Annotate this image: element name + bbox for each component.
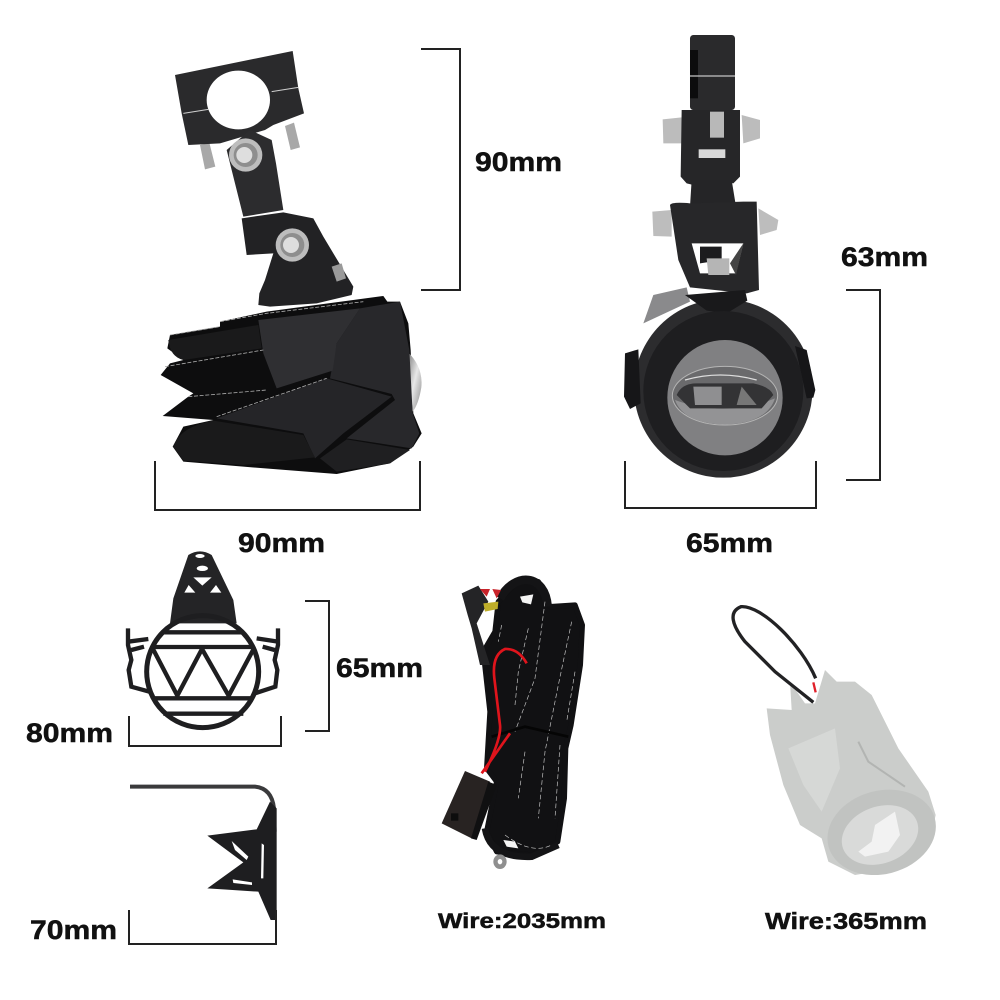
outer housing	[634, 299, 813, 478]
lens reflector	[677, 375, 773, 408]
mount foot	[685, 290, 747, 313]
zip tie	[492, 727, 568, 737]
red wires	[482, 649, 527, 773]
upper bolts	[663, 115, 760, 143]
dimension bracket: guard width	[129, 716, 281, 746]
right wing	[255, 628, 278, 693]
short wire loop	[733, 607, 816, 702]
lens window	[672, 366, 778, 425]
fork inner nut	[700, 243, 743, 275]
middle shiny panel	[258, 308, 360, 388]
upper bolt	[229, 138, 262, 172]
label: wire length 365mm: Wire:365mm	[765, 908, 927, 934]
handlebar clamp	[175, 51, 304, 145]
label: wire length 2035mm: Wire:2035mm	[438, 910, 606, 933]
top connector	[462, 586, 501, 665]
small thread	[332, 263, 346, 282]
label: side width 90mm: 90mm	[238, 528, 325, 558]
relay box	[442, 771, 497, 840]
label: guard height 65mm: 65mm	[336, 653, 423, 683]
lens lower glass	[675, 398, 775, 425]
rear fin surfaces	[168, 325, 315, 465]
grey shoulder	[643, 287, 690, 323]
side view light with bracket	[161, 51, 422, 474]
inner ring	[643, 311, 803, 471]
guard body	[207, 802, 277, 920]
panel crease	[858, 742, 905, 787]
upper arm	[227, 130, 283, 217]
dimension bracket: side guard width	[129, 910, 276, 944]
lens	[407, 352, 422, 412]
front bezel	[818, 778, 946, 887]
mounting tab	[170, 551, 237, 623]
lower body panel	[217, 378, 392, 458]
ring terminal	[493, 854, 507, 869]
guard ring	[147, 616, 259, 728]
wire bundle	[483, 580, 582, 855]
side tabs	[624, 346, 815, 409]
W frame	[153, 648, 254, 696]
front guard grille	[128, 551, 278, 728]
label: front height 63mm: 63mm	[841, 242, 928, 272]
wiring harness	[442, 580, 582, 869]
light housing	[161, 296, 422, 474]
dimension bracket: guard height	[305, 601, 329, 731]
fork gap and thread	[699, 112, 725, 158]
dimension bracket: front width	[625, 461, 816, 508]
label: side height 90mm: 90mm	[475, 147, 562, 177]
wire highlights	[498, 602, 575, 848]
lower bolt	[276, 228, 309, 262]
top clamp	[690, 35, 735, 110]
lower fork	[670, 202, 759, 293]
label: side guard 70mm: 70mm	[30, 915, 117, 945]
neck	[690, 180, 736, 207]
highlight panel	[788, 728, 840, 812]
bottom body panel	[320, 439, 410, 472]
label: guard width 80mm: 80mm	[26, 718, 113, 748]
top loop wire	[500, 580, 548, 607]
dimension bracket: side width	[155, 461, 420, 510]
red wire end	[813, 682, 816, 692]
clamp bolts	[200, 123, 300, 169]
clamp seams	[183, 87, 298, 113]
bottom loop wire	[485, 828, 558, 857]
front view light with bracket	[624, 35, 815, 478]
lens glare	[858, 812, 900, 857]
lens ring	[833, 795, 927, 875]
label: front width 65mm: 65mm	[686, 528, 773, 558]
rear fin highlights	[165, 302, 363, 417]
lens disc	[667, 340, 783, 455]
side guard grille	[130, 787, 277, 920]
lower arm	[242, 212, 353, 307]
lower bolts	[652, 208, 778, 237]
housing silhouette	[767, 670, 936, 875]
faded light with short wire	[733, 607, 946, 887]
dimension bracket: side height	[421, 49, 460, 290]
bundle gaps	[503, 594, 533, 848]
horizontal bars	[153, 632, 253, 714]
rear body panel	[330, 302, 419, 448]
left wing	[128, 628, 152, 692]
upper fork	[681, 110, 740, 189]
strap	[130, 787, 275, 832]
dimension bracket: front height	[846, 290, 880, 480]
